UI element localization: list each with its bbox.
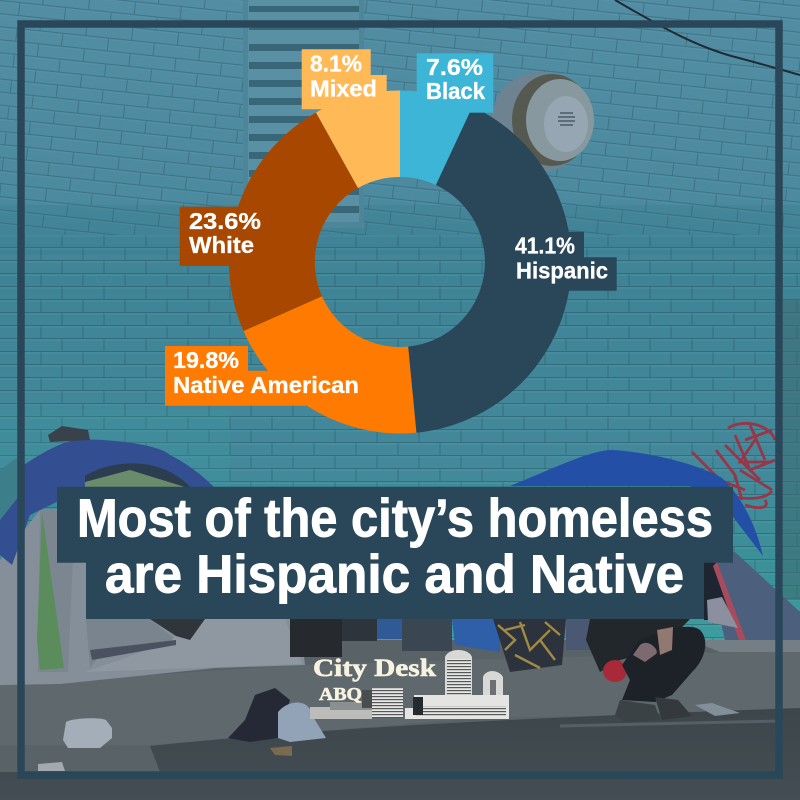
title: are Hispanic and Native bbox=[105, 545, 684, 605]
logo: City Desk ABQ bbox=[310, 650, 509, 719]
label: Hispanic 41.1% bbox=[505, 232, 617, 291]
patterned bag bbox=[493, 619, 566, 672]
logo: City Desk ABQ: City Desk bbox=[313, 655, 436, 682]
label: White 23.6% bbox=[180, 207, 270, 266]
label: Black 7.6% bbox=[417, 53, 493, 113]
label: Black 7.6%: 7.6% bbox=[426, 54, 483, 80]
segment: Native American bbox=[244, 296, 416, 433]
logo: City Desk ABQ: ABQ bbox=[319, 684, 362, 704]
label: Hispanic 41.1%: Hispanic bbox=[516, 258, 608, 284]
litter bbox=[38, 688, 740, 771]
label: White 23.6%: White bbox=[189, 232, 254, 258]
title: Most of the city’s homeless bbox=[77, 489, 713, 549]
label: Mixed 8.1% bbox=[302, 49, 387, 109]
sidewalk and road bbox=[0, 640, 800, 800]
skyline bbox=[310, 650, 509, 719]
overhead cable bbox=[615, 0, 800, 75]
label: Mixed 8.1%: 8.1% bbox=[310, 50, 362, 76]
left tent bbox=[0, 426, 305, 685]
label: Mixed 8.1%: Mixed bbox=[310, 76, 377, 102]
label: White 23.6%: 23.6% bbox=[189, 208, 261, 234]
right tent bbox=[510, 450, 800, 652]
chain link fence bbox=[783, 300, 800, 600]
label: Native American 19.8% bbox=[165, 346, 367, 406]
wall vent bbox=[243, 0, 364, 228]
label: Hispanic 41.1%: 41.1% bbox=[515, 232, 575, 258]
segment: Hispanic bbox=[408, 107, 571, 433]
belongings bbox=[290, 619, 500, 657]
graffiti bbox=[692, 423, 775, 508]
segment: Black bbox=[400, 90, 472, 185]
label: Native American 19.8%: Native American bbox=[173, 372, 359, 398]
label: Native American 19.8%: 19.8% bbox=[173, 347, 239, 373]
round exhaust vent bbox=[491, 72, 594, 172]
crouching person bbox=[586, 619, 705, 722]
label: Black 7.6%: Black bbox=[426, 78, 485, 104]
segment: White bbox=[229, 112, 358, 331]
donut chart bbox=[229, 90, 571, 433]
title bbox=[57, 487, 733, 619]
segment: Mixed bbox=[316, 90, 400, 188]
